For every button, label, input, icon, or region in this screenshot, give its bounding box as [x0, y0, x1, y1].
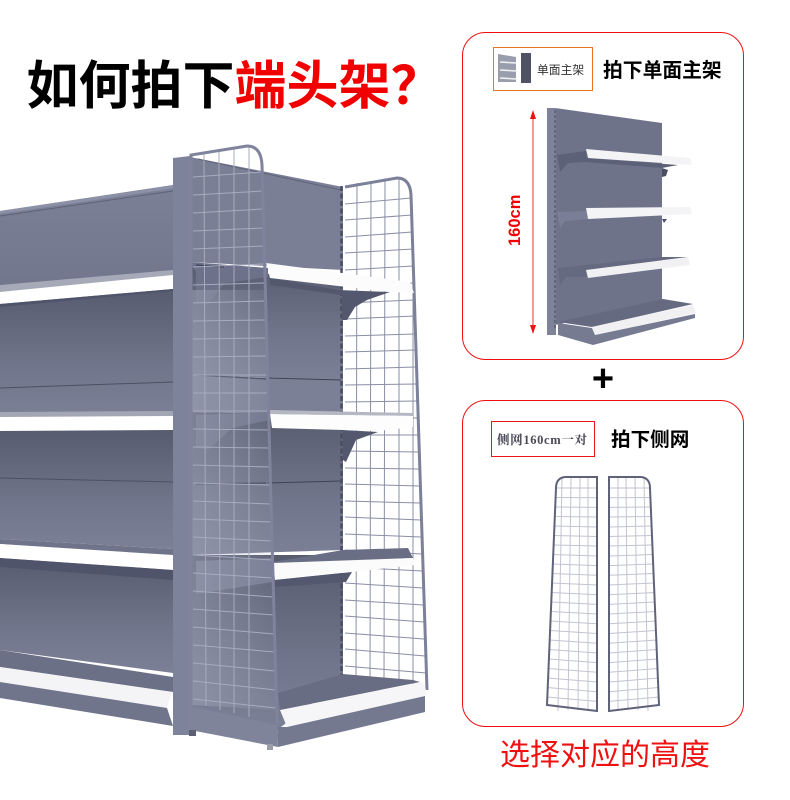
height label: 160cm	[506, 195, 524, 246]
single rack illustration	[547, 108, 696, 345]
post	[173, 156, 190, 735]
left shelves	[0, 270, 173, 726]
option tag: single main rack	[494, 48, 592, 90]
option tag: single main rack: 单面主架	[537, 63, 584, 77]
heading: 拍下单面主架	[603, 60, 722, 82]
left back panels	[0, 185, 173, 673]
panel frame	[462, 400, 744, 726]
title: 如何拍下端头架？	[26, 58, 443, 116]
plus sign: +	[592, 358, 614, 400]
panel frame	[462, 32, 744, 360]
right mesh panel	[609, 477, 659, 711]
brackets behind front mesh	[190, 262, 272, 594]
right shelves	[266, 263, 428, 747]
front mesh	[191, 146, 277, 725]
right side mesh	[345, 178, 427, 690]
main end-cap shelf illustration	[0, 146, 428, 750]
end base and feet	[189, 706, 278, 750]
mesh sheen	[192, 290, 276, 710]
panel: side mesh	[462, 400, 744, 726]
option tag: side mesh pair: 侧网160cm一对	[497, 432, 587, 447]
left mesh panel	[547, 477, 597, 711]
heading: 拍下侧网	[611, 429, 689, 451]
height arrow	[530, 110, 536, 334]
panel: single-sided main rack	[462, 32, 744, 360]
option tag: side mesh pair	[492, 422, 594, 456]
right side panel	[190, 157, 343, 730]
right perforated upright	[340, 186, 343, 680]
footer caption: 选择对应的高度	[500, 739, 710, 772]
